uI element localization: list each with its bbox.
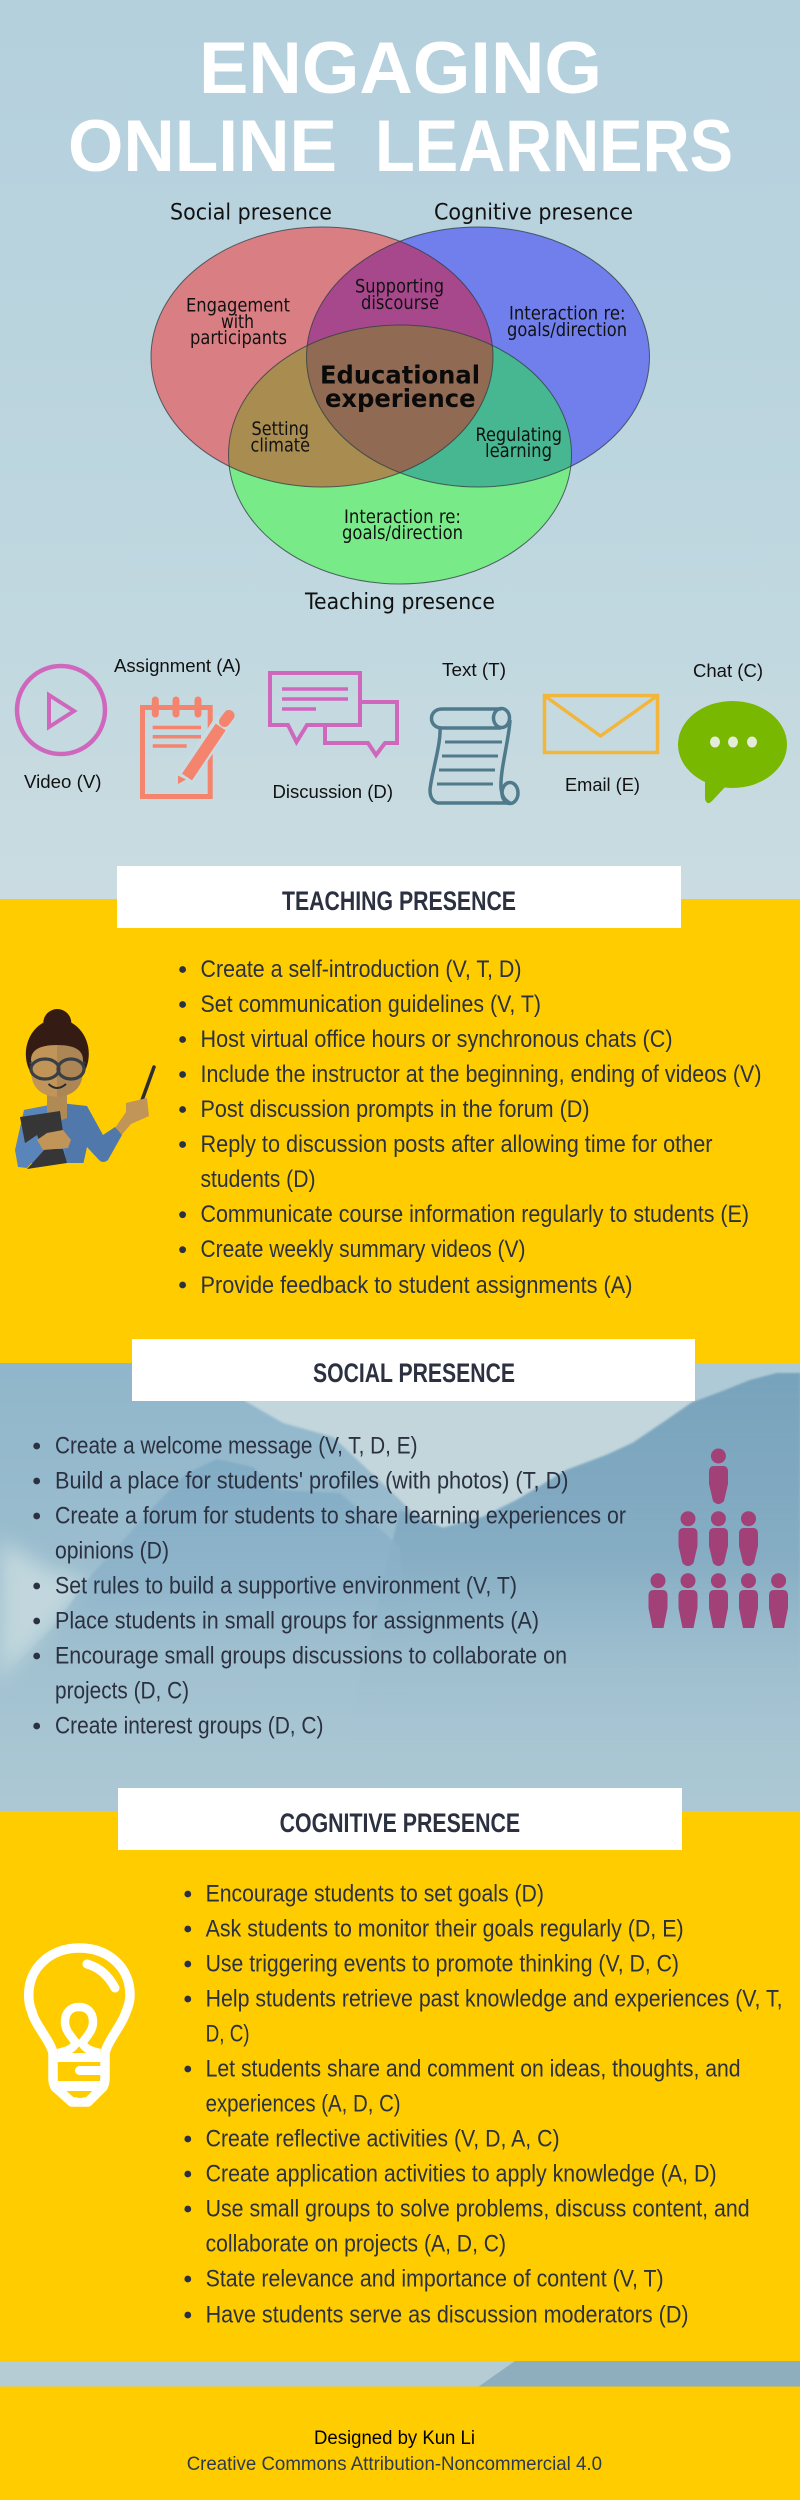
venn region: teaching interaction bbox=[342, 506, 463, 544]
list: teaching strategies: students (D) bbox=[200, 1166, 316, 1193]
venn region: cognitive interaction bbox=[507, 302, 627, 341]
list: cognitive strategies: Ask students to monitor their goals regularly (D, E) bbox=[206, 1916, 684, 1942]
list: cognitive strategies: experiences (A, D, C) bbox=[206, 2090, 401, 2118]
list: cognitive strategies: collaborate on projects (A, D, C) bbox=[206, 2230, 506, 2258]
title bbox=[68, 28, 733, 187]
venn label: cognitive presence: Cognitive presence bbox=[434, 200, 633, 226]
icon: assignment notepad bbox=[142, 700, 229, 796]
list: social strategies: projects (D, C) bbox=[55, 1678, 189, 1704]
list: cognitive strategies bbox=[184, 1880, 783, 2328]
list: social strategies bbox=[33, 1432, 626, 1740]
list: cognitive strategies: Use triggering events to promote thinking (V, D, C) bbox=[206, 1950, 679, 1978]
label: email: Email (E) bbox=[565, 774, 640, 795]
venn region: engagement with participants: Engagement bbox=[186, 294, 290, 316]
heading: social presence bbox=[132, 1339, 695, 1401]
list: teaching strategies: Reply to discussion posts after allowing time for other bbox=[200, 1131, 712, 1158]
list: teaching strategies bbox=[179, 956, 762, 1299]
list: cognitive strategies: Encourage students to set goals (D) bbox=[206, 1880, 544, 1908]
venn region: setting climate bbox=[250, 418, 310, 456]
venn region: regulating learning: learning bbox=[485, 440, 552, 462]
heading: cognitive presence: COGNITIVE PRESENCE bbox=[280, 1808, 520, 1838]
venn label: teaching presence: Teaching presence bbox=[304, 590, 495, 615]
venn centre: educational experience bbox=[320, 360, 480, 413]
title: ENGAGING bbox=[199, 28, 602, 109]
list: cognitive strategies: Create application activities to apply knowledge (A, D) bbox=[206, 2160, 717, 2188]
label: video: Video (V) bbox=[24, 771, 102, 792]
list: teaching strategies: Provide feedback to student assignments (A) bbox=[200, 1272, 632, 1299]
credit: licence: Creative Commons Attribution-Noncommercial 4.0 bbox=[187, 2453, 602, 2475]
list: social strategies: Create a forum for students to share learning experiences or bbox=[55, 1502, 626, 1530]
mountain photo background bbox=[0, 1355, 800, 1811]
list: cognitive strategies: Have students serve as discussion moderators (D) bbox=[206, 2302, 689, 2328]
venn diagram: community of inquiry bbox=[151, 200, 650, 615]
heading: teaching presence: TEACHING PRESENCE bbox=[282, 886, 516, 916]
icon: group of people pyramid bbox=[648, 1448, 788, 1628]
icon: discussion bubbles bbox=[270, 673, 397, 755]
venn centre: educational experience: experience bbox=[325, 384, 476, 413]
media legend row bbox=[17, 655, 787, 804]
list: cognitive strategies: Create reflective activities (V, D, A, C) bbox=[206, 2126, 560, 2152]
venn region: cognitive interaction: goals/direction bbox=[507, 319, 627, 341]
label: chat: Chat (C) bbox=[693, 660, 763, 681]
icon: chat bubble bbox=[678, 701, 787, 803]
icon: email envelope bbox=[544, 696, 658, 752]
title: ONLINE bbox=[68, 106, 337, 187]
background strip: mountain bbox=[0, 2361, 800, 2387]
venn region: cognitive interaction: Interaction re: bbox=[509, 302, 626, 324]
credit: designer: Designed by Kun Li bbox=[314, 2427, 475, 2449]
list: teaching strategies: Host virtual office hours or synchronous chats (C) bbox=[200, 1026, 672, 1053]
heading: cognitive presence bbox=[118, 1788, 682, 1850]
list: social strategies: Set rules to build a supportive environment (V, T) bbox=[55, 1572, 517, 1600]
venn region: engagement with participants: participants bbox=[190, 327, 287, 349]
venn region: engagement with participants: with bbox=[221, 311, 254, 333]
background: sky bbox=[0, 0, 800, 900]
heading: teaching presence bbox=[117, 866, 681, 928]
icon: light bulb bbox=[29, 1948, 130, 2102]
list: teaching strategies: Set communication guidelines (V, T) bbox=[200, 991, 541, 1018]
panel: teaching presence bbox=[0, 866, 800, 1363]
panel: cognitive presence bbox=[0, 1788, 800, 2361]
list: teaching strategies: Post discussion prompts in the forum (D) bbox=[200, 1096, 590, 1123]
list: social strategies: Encourage small groups discussions to collaborate on bbox=[55, 1642, 567, 1670]
label: text: Text (T) bbox=[442, 659, 506, 680]
list: social strategies: opinions (D) bbox=[55, 1538, 169, 1564]
list: social strategies: Create a welcome message (V, T, D, E) bbox=[55, 1432, 418, 1460]
icon: video bbox=[17, 666, 105, 754]
venn region: supporting discourse bbox=[355, 276, 444, 314]
venn centre: educational experience: Educational bbox=[320, 360, 480, 390]
list: cognitive strategies: D, C) bbox=[206, 2020, 250, 2048]
venn region: regulating learning: Regulating bbox=[476, 424, 562, 446]
label: assignment: Assignment (A) bbox=[114, 655, 241, 676]
list: teaching strategies: Communicate course information regularly to students (E) bbox=[200, 1201, 749, 1228]
list: cognitive strategies: Let students share and comment on ideas, thoughts, and bbox=[206, 2056, 741, 2082]
heading: social presence: SOCIAL PRESENCE bbox=[313, 1358, 515, 1388]
list: social strategies: Build a place for students' profiles (with photos) (T, D) bbox=[55, 1468, 568, 1494]
label: discussion: Discussion (D) bbox=[272, 781, 393, 802]
venn region: supporting discourse: discourse bbox=[361, 292, 439, 314]
list: cognitive strategies: State relevance and importance of content (V, T) bbox=[206, 2266, 664, 2292]
venn label: social presence: Social presence bbox=[170, 200, 332, 226]
illustration: teacher with pointer bbox=[15, 1009, 154, 1169]
footer bbox=[0, 2386, 800, 2500]
venn region: engagement with participants bbox=[186, 294, 290, 349]
venn region: setting climate: climate bbox=[250, 434, 310, 456]
venn region: setting climate: Setting bbox=[252, 418, 309, 440]
list: teaching strategies: Create weekly summary videos (V) bbox=[200, 1236, 526, 1263]
venn region: teaching interaction: Interaction re: bbox=[344, 506, 461, 528]
venn region: regulating learning bbox=[476, 424, 562, 462]
list: social strategies: Create interest groups (D, C) bbox=[55, 1712, 324, 1740]
icon: text scroll bbox=[430, 708, 518, 804]
list: cognitive strategies: Use small groups to solve problems, discuss content, and bbox=[206, 2196, 750, 2222]
list: teaching strategies: Create a self-introduction (V, T, D) bbox=[200, 956, 522, 983]
venn region: supporting discourse: Supporting bbox=[355, 276, 444, 298]
venn region: teaching interaction: goals/direction bbox=[342, 522, 463, 544]
panel: social presence bbox=[0, 1339, 800, 1811]
title: LEARNERS bbox=[375, 106, 733, 187]
list: social strategies: Place students in small groups for assignments (A) bbox=[55, 1608, 539, 1634]
